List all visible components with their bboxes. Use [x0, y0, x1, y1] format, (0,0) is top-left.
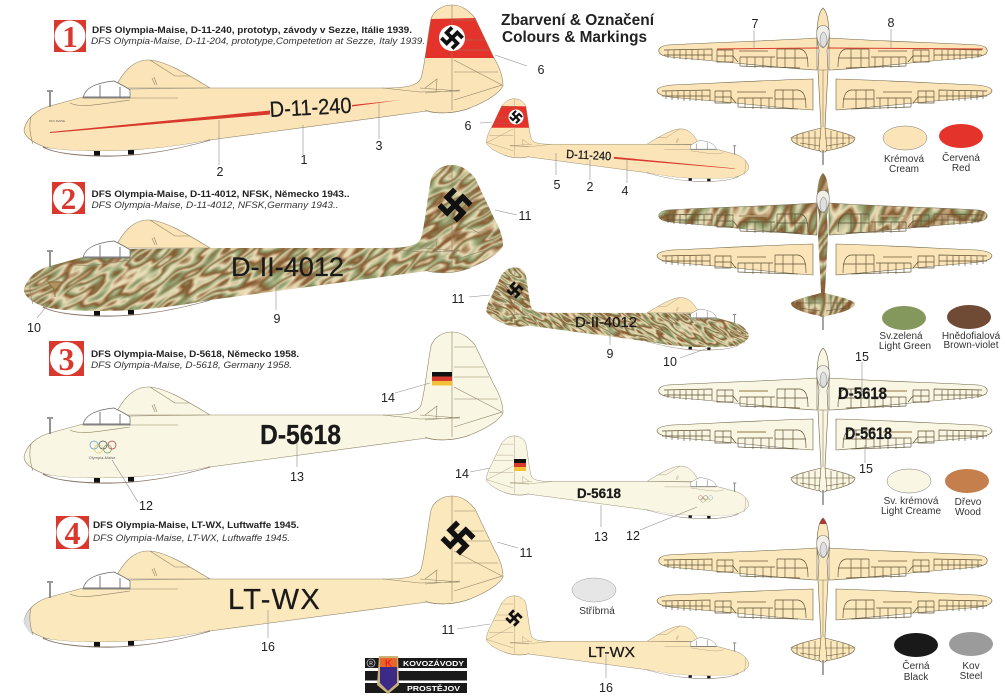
title: colours and markings — [501, 12, 655, 46]
callouts small view 2: 10 — [663, 355, 677, 369]
callouts small view 3: 13 — [594, 530, 608, 544]
caption 2: DFS Olympia-Maise, D-11-4012, NFSK,Germany 1943.. — [92, 200, 338, 210]
side view 3: D-5618: Olympia-Maise — [89, 455, 116, 460]
caption 2 — [92, 189, 350, 210]
small side view 3: D-5618 — [577, 485, 621, 501]
callouts side view 2: 9 — [274, 312, 281, 326]
caption 4: DFS Olympia-Maise, LT-WX, Luftwaffe 1945. — [93, 520, 299, 530]
side view 2: D-11-4012 camouflage — [24, 165, 503, 317]
small side view 1: D-11-240 — [566, 147, 612, 163]
swatch: steel: Kov — [962, 661, 980, 672]
callouts top view 3: 15 — [855, 350, 869, 364]
callouts small view 3 — [455, 467, 697, 544]
callouts side view 2: 11 — [519, 209, 532, 223]
callouts side view 1 — [217, 55, 545, 179]
swatch: cream: Krémová — [884, 154, 924, 165]
swatch: red — [939, 124, 983, 174]
side view 4: LT-WX — [24, 496, 503, 647]
swatch: cream — [883, 126, 927, 175]
badge 3: 3 — [58, 341, 74, 377]
swatch: silver — [572, 578, 616, 617]
swatch: red: Červená — [942, 151, 980, 164]
swatch: light cream: Sv. krémová — [884, 496, 939, 507]
title: colours and markings: Zbarvení & Označení — [501, 12, 655, 29]
swatch: light green — [879, 306, 931, 352]
swatch: light green: Light Green — [879, 341, 931, 352]
caption 3: DFS Olympia-Maise, D-5618, Germany 1958. — [91, 360, 292, 370]
small side view 4 — [486, 596, 749, 679]
swatch: cream: Cream — [889, 164, 919, 175]
swatch: black — [894, 633, 938, 683]
side view 3: D-5618: D-5618 — [260, 419, 341, 450]
callouts side view 3 — [112, 383, 430, 513]
callouts small view 1: 5 — [554, 178, 561, 192]
caption 4: DFS Olympia-Maise, LT-WX, Luftwaffe 1945. — [93, 533, 290, 543]
callouts small view 1: 4 — [622, 184, 629, 198]
swatch: light green: Sv.zelená — [879, 331, 923, 342]
side view 4: LT-WX: LT-WX — [228, 584, 321, 616]
swatch: steel — [949, 632, 993, 682]
callouts side view 4: 11 — [520, 546, 533, 560]
callouts side view 1: 1 — [301, 153, 308, 167]
top views 3 — [657, 348, 992, 505]
callouts small view 1 — [465, 119, 629, 198]
callouts side view 4 — [261, 542, 533, 654]
callouts top view 1: 7 — [752, 17, 759, 31]
callouts side view 3: 12 — [139, 499, 153, 513]
small side view 2 — [486, 267, 749, 350]
caption 2: DFS Olympia-Maise, D-11-4012, NFSK, Německo 1943.. — [92, 189, 350, 199]
callouts small view 2: 11 — [452, 292, 465, 306]
caption 4 — [93, 520, 299, 543]
swatch: brown-violet: Hnědofialová — [942, 331, 1001, 342]
swatch: brown-violet — [942, 305, 1001, 351]
top views 3: D-5618 — [838, 384, 887, 403]
swatch: red: Red — [952, 163, 970, 174]
logo: Kovozávody Prostějov: PROSTĚJOV — [407, 684, 460, 693]
callouts side view 1: 6 — [538, 63, 545, 77]
caption 3 — [91, 349, 299, 370]
badge 1: 1 — [62, 19, 78, 54]
swatch: light cream: Light Creame — [881, 506, 941, 517]
small side view 3 — [486, 436, 749, 519]
callouts small view 4 — [442, 623, 613, 695]
top views 4 — [657, 518, 992, 675]
top views 2 camouflage — [656, 173, 992, 330]
callouts small view 1: 2 — [587, 180, 594, 194]
caption 1: DFS Olympia-Maise, D-11-204, prototype,Competetion at Sezze, Italy 1939. — [91, 36, 425, 46]
callouts small view 2: 9 — [607, 347, 614, 361]
callouts side view 1: 2 — [217, 165, 224, 179]
side view 3: D-5618 — [24, 332, 503, 483]
badge 2: 2 — [61, 181, 76, 216]
caption 1: DFS Olympia-Maise, D-11-240, prototyp, závody v Sezze, Itálie 1939. — [92, 25, 412, 35]
logo: Kovozávody Prostějov: K — [385, 658, 393, 670]
swatch: silver: Stříbrná — [579, 606, 615, 617]
swatch: wood: Dřevo — [955, 497, 982, 508]
swatch: black: Black — [904, 672, 929, 683]
top views 3: D-5618 — [845, 424, 892, 443]
callouts side view 2: 10 — [27, 321, 41, 335]
logo: Kovozávody Prostějov: KOVOZÁVODY — [403, 659, 464, 668]
swatch: wood: Wood — [955, 507, 981, 518]
side view 1: D-11-240 — [24, 5, 503, 156]
caption 3: DFS Olympia-Maise, D-5618, Německo 1958. — [91, 349, 299, 359]
callouts top view 1 — [752, 16, 895, 48]
callouts small view 2 — [452, 292, 708, 369]
badge 4: 4 — [64, 515, 80, 551]
callouts top view 3 — [855, 350, 873, 476]
caption 1 — [91, 25, 425, 46]
callouts top view 3: 15 — [859, 462, 873, 476]
badge 2 — [52, 181, 85, 216]
small side view 4: LT-WX — [588, 644, 635, 661]
callouts side view 3: 14 — [381, 391, 395, 405]
swatch: wood — [945, 469, 989, 518]
callouts small view 3: 14 — [455, 467, 469, 481]
callouts side view 1: 3 — [376, 139, 383, 153]
logo: Kovozávody Prostějov — [365, 656, 467, 694]
side view 1: D-11-240: DFS MAISE — [49, 119, 65, 123]
callouts side view 3: 13 — [290, 470, 304, 484]
callouts small view 4: 11 — [442, 623, 455, 637]
side view 1: D-11-240: D-11-240 — [269, 93, 352, 122]
callouts small view 1: 6 — [465, 119, 472, 133]
badge 3 — [49, 341, 84, 377]
logo: Kovozávody Prostějov: R — [369, 661, 373, 667]
small side view 2: D-II-4012 — [575, 314, 637, 331]
top views 1 — [657, 8, 992, 165]
callouts side view 2 — [27, 209, 532, 335]
callouts small view 4: 16 — [599, 681, 613, 695]
callouts small view 3: 12 — [626, 529, 640, 543]
swatch: brown-violet: Brown-violet — [943, 340, 999, 351]
badge 1 — [54, 19, 86, 54]
title: colours and markings: Colours & Markings — [502, 29, 647, 46]
callouts side view 4: 16 — [261, 640, 275, 654]
swatch: black: Černá — [902, 659, 930, 672]
callouts top view 1: 8 — [888, 16, 895, 30]
swatch: steel: Steel — [960, 671, 982, 682]
swatch: light cream — [881, 469, 941, 517]
badge 4 — [56, 515, 89, 551]
small side view 1 — [486, 99, 749, 181]
side view 2: D-11-4012 camouflage: D-II-4012 — [231, 252, 344, 282]
